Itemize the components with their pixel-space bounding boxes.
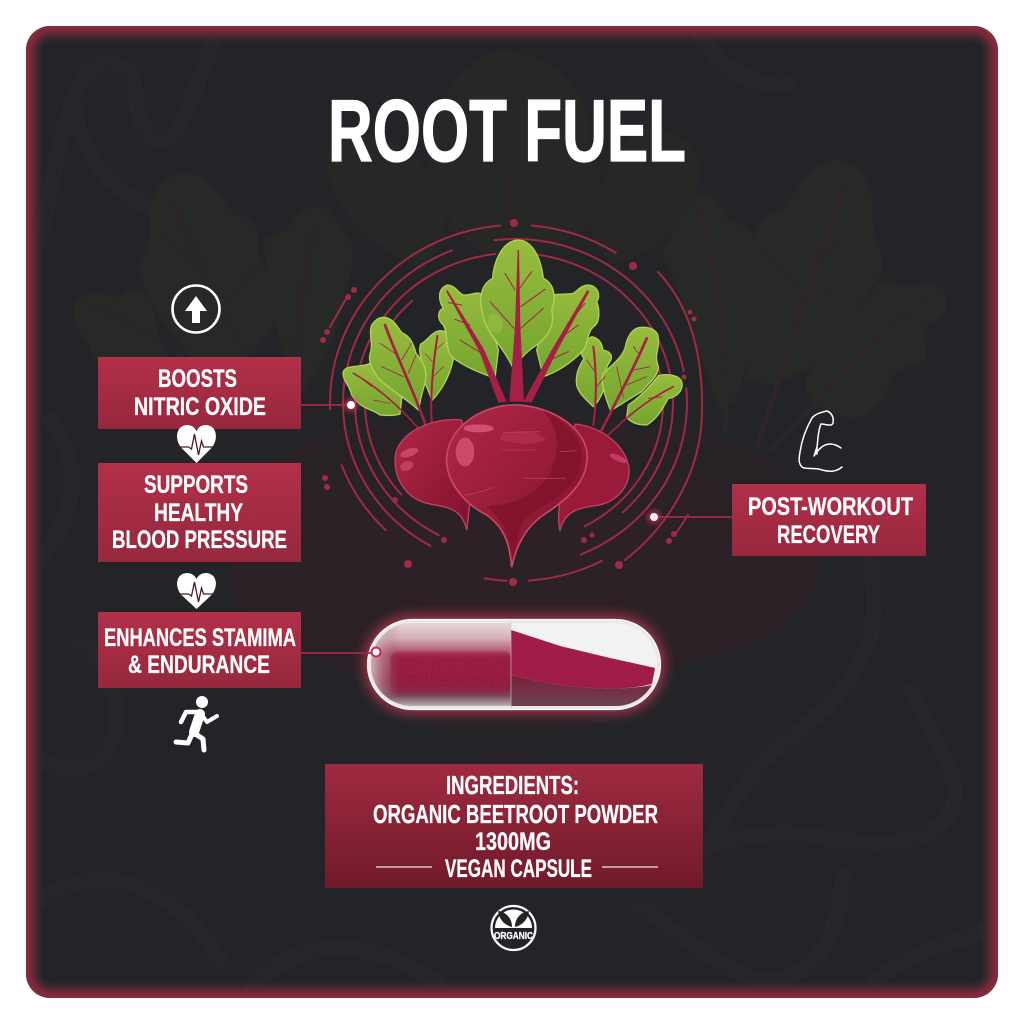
label: ingredients: 1300MG	[475, 828, 551, 856]
label: ingredients: INGREDIENTS:	[446, 770, 579, 800]
ring dots	[320, 219, 696, 586]
ghost leaves: top centre	[328, 50, 699, 270]
leaves: left bunch	[343, 317, 454, 416]
label: post-workout recovery	[732, 484, 926, 556]
capsule	[365, 617, 663, 712]
centre beet	[447, 405, 587, 567]
label: ingredients: ORGANIC BEETROOT POWDER	[373, 799, 658, 829]
label: supports healthy blood pressure: HEALTHY	[154, 499, 243, 527]
beetroot illustration	[343, 240, 682, 567]
label: boosts nitric oxide	[98, 357, 301, 429]
label: ingredients: VEGAN CAPSULE	[445, 855, 592, 883]
label: ingredients	[325, 764, 703, 888]
leaves: right bunch	[576, 327, 682, 425]
connector: recovery	[647, 510, 732, 524]
title: ROOT FUEL	[328, 81, 686, 180]
label: enhances stamina: & ENDURANCE	[128, 651, 270, 679]
label: post-workout recovery: RECOVERY	[777, 521, 880, 549]
label: supports healthy blood pressure: BLOOD PRESSURE	[112, 526, 287, 554]
leaves: centre bunch	[439, 240, 599, 378]
icon: flexed arm	[799, 411, 842, 471]
ghost leaves: right cluster	[698, 182, 927, 452]
label: boosts nitric oxide: BOOSTS	[158, 365, 237, 393]
icon: heart pulse upper	[177, 425, 216, 463]
icon: heart pulse lower	[177, 573, 216, 609]
label: enhances stamina	[98, 612, 301, 688]
connector: nitric oxide	[301, 398, 358, 412]
label: supports healthy blood pressure	[98, 463, 301, 562]
label: supports healthy blood pressure: SUPPORTS	[144, 471, 248, 499]
connector: stamina	[301, 648, 380, 656]
label: enhances stamina: ENHANCES STAMIMA	[104, 624, 296, 652]
left beet	[395, 420, 473, 530]
right beet	[559, 424, 629, 530]
icon: organic badge	[492, 906, 536, 950]
label: post-workout recovery: POST-WORKOUT	[748, 493, 913, 521]
ghost leaves: left cluster	[155, 201, 164, 220]
icon: up arrow in circle	[172, 286, 220, 332]
icon: organic badge: ORGANIC	[494, 931, 533, 942]
label: boosts nitric oxide: NITRIC OXIDE	[134, 393, 266, 421]
icon: runner	[176, 696, 217, 750]
concentric rings around beets	[330, 225, 702, 581]
ghost beet silhouette	[226, 411, 823, 800]
